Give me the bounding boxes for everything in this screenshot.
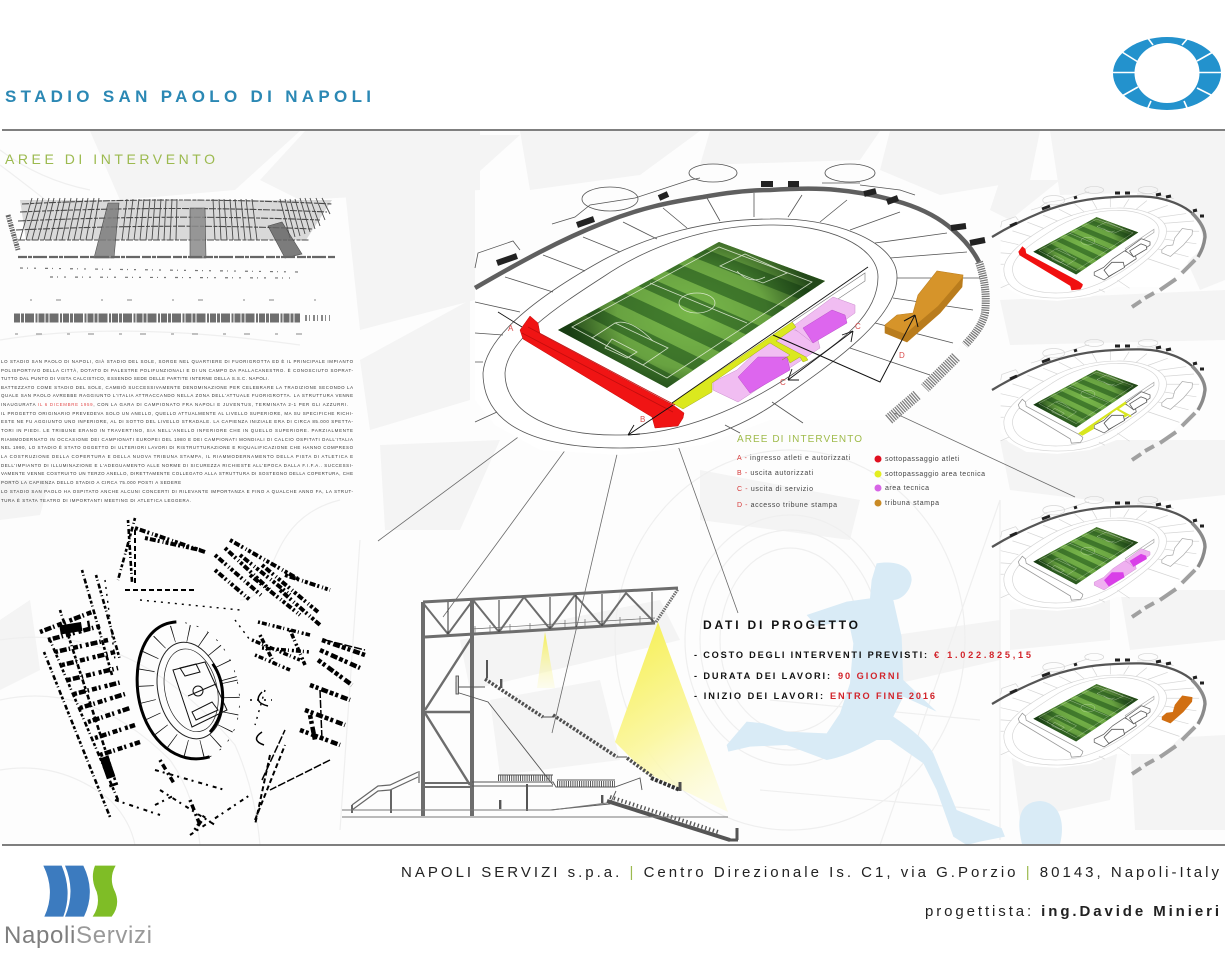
text block: dati di progetto: - INIZIO DEI LAVORI: [694,691,823,701]
site plan: city blocks [40,518,365,835]
heading: dati di progetto: DATI DI PROGETTO [703,618,858,632]
text block: dati di progetto: € 1.022.825,15 [934,650,1031,660]
header rule [2,129,1225,131]
logo wordmark: NapoliServizi [4,922,152,949]
text block: stadium history: NEL 1990, LO STADIO È STATO OGGETTO DI ULTERIORI LAVORI DI RISTRUTTURAZIONE E RIQUALIFICAZIONE CHE HANNO COMPRESO [1,445,354,450]
thumbnail: area tecnica [992,496,1205,617]
text block: stadium history [1,359,354,503]
legend: area tecnica [885,485,929,492]
text block: dati di progetto: - DURATA DEI LAVORI: [694,671,830,681]
logo mark [43,866,117,917]
legend: B - uscita autorizzati [737,470,813,477]
light cone small [537,632,555,688]
legend heading: AREE DI INTERVENTO [737,434,862,445]
legend: sottopassaggio area tecnica [885,471,985,478]
lower tribune [607,797,738,840]
text block: stadium history: RIAMMODERNATO IN OCCASIONE DEI CAMPIONATI EUROPEI DEL 1980 E DEI CAMPIONATI MONDIALI DI CALCIO OSPITATI DALL'ITALIA [1,437,353,442]
point labels: C [780,378,786,387]
area: sottopassaggio atleti [520,316,684,428]
connector lines from stadium to section [378,375,1075,733]
text block: stadium history: LO STADIO SAN PAOLO DI NAPOLI, GIÀ STADIO DEL SOLE, SORGE NEL QUARTIERE DI FUORIGROTTA ED È IL PRINCIPALE IMPIANTO [1,359,354,364]
point labels: D [899,351,905,360]
text block: stadium history: PORTÒ LA CAPIENZA DELLO STADIO A CIRCA 75.000 POSTI A SEDERE [1,480,181,485]
stand cross-section [342,588,738,840]
text block: stadium history: DELL'IMPIANTO DI ILLUMINAZIONE E L'ADEGUAMENTO ALLE NORME DI SICUREZZA RICHIESTE ALL'EPOCA DALLA F.I.F.A.. SUCCESSI- [1,463,354,468]
legend: tribuna stampa [885,500,939,507]
decks and internal lines [456,660,642,811]
text block: dati di progetto: - COSTO DEGLI INTERVENTI PREVISTI: [694,650,927,660]
text block: stadium history: ESTE NE FU AGGIUNTO UNO INFERIORE, AL DI SOTTO DEL LIVELLO STRADALE. LA CAPIENZA INIZIALE ERA DI CIRCA 85.000 SPETTA- [1,419,354,424]
football silhouette [1019,801,1062,844]
text block: dati di progetto: ENTRO FINE 2016 [830,691,935,701]
site plan: stadium [124,611,252,770]
point labels: B [640,415,645,424]
human figures [499,679,603,809]
text block: dati di progetto: 90 GIORNI [838,671,899,681]
main tribune steps [485,679,680,791]
light cone large [615,622,728,812]
stadium rings and radial lines [475,164,980,448]
point labels: A [508,324,514,333]
roof truss [423,588,678,637]
text block: stadium history: TORI IN PIEDI. LE TRIBUNE ERANO IN TRAVERTINO, SIA NELL'ANELLO INFERIORE CHE IN QUELLO SUPERIORE. PARZIALMENTE [1,428,353,433]
area: tribuna stampa [885,271,963,342]
icon: stadium logo ring [1112,37,1223,110]
legend: sottopassaggio atleti [885,456,959,463]
footer address: NAPOLI SERVIZI s.p.a. | Centro Direzionale Is. C1, via G.Porzio | 80143, Napoli-Italy [401,864,1220,881]
football pitch [558,242,825,388]
text block: dati di progetto [694,618,1031,701]
legend: C - uscita di servizio [737,486,813,493]
legend: D - accesso tribune stampa [737,502,837,509]
text block: stadium history: IL PROGETTO ORIGINARIO PREVEDEVA SOLO UN ANELLO, QUELLO ATTUALMENTE AL LIVELLO SUPERIORE, MA SU SPECIFICHE RICHI- [1,411,354,416]
site plan: pitch [173,662,227,727]
ground line [342,803,728,817]
text block: stadium history: TUTTO DAL PUNTO DI VISTA CALCISTICO, ESSENDO SEDE DELLE PARTITE INTERNE DELLA S.S.C. NAPOLI. [1,376,269,381]
area: sottopassaggio area tecnica [672,322,808,409]
thumbnail: tribuna stampa [992,653,1205,774]
aerial site plan [40,518,365,835]
logo: Napoli Servizi [4,866,152,949]
point labels [508,322,905,424]
white service strip [792,273,865,327]
thumbnail: sottopassaggio area tecnica [992,339,1205,460]
footer designer credit: progettista: ing.Davide Minieri [925,903,1219,920]
thumbnail: sottopassaggio atleti [992,186,1205,307]
soccer player silhouette [727,562,1005,845]
stadium outer band [475,184,986,420]
footer rule [2,844,1225,846]
panel: main stadium axonometric [475,164,988,455]
legend: A - ingresso atleti e autorizzati [737,455,850,462]
text block: stadium history: POLISPORTIVO DELLA CITTÀ, DOTATO DI PALESTRE POLIFUNZIONALI E DI UN CAMPO DA PALLACANESTRO. È CONOSCIUTO SOPRAT- [1,368,354,373]
text block: stadium history: INAUGURATA IL 6 DICEMBRE 1959, CON LA GARA DI CAMPIONATO FRA NAPOLI E JUVENTUS, TERMINATA 2-1 PER GLI AZZURRI. [1,402,348,407]
title: STADIO SAN PAOLO DI NAPOLI [5,87,371,106]
sketch: stand elevation [8,198,335,334]
columns and braces [423,600,472,816]
text block: stadium history: LA COSTRUZIONE DELLA COPERTURA E DELLA NUOVA TRIBUNA STAMPA, IL RIAMMODERNAMENTO DELLA PISTA DI ATLETICA E [1,454,353,459]
point labels: C [855,322,861,331]
heading: aree di intervento: AREE DI INTERVENTO [5,151,215,167]
text block: stadium history: VAMENTE VENNE COSTRUITO UN TERZO ANELLO, DIRETTAMENTE COLLEGATO ALLA STRUTTURA DI SOSTEGNO DELLA COPERTURA, CHE [1,471,353,476]
faint city map background [0,131,1225,845]
text block: stadium history: BATTEZZATO COME STADIO DEL SOLE, CAMBIÒ SUCCESSIVAMENTE DENOMINAZIONE PER CELEBRARE LA TRADIZIONE SECONDO LA [1,385,353,390]
text block: stadium history: TURA È STATA TEATRO DI IMPORTANTI MEETING DI ATLETICA LEGGERA. [1,498,191,503]
legend [737,434,985,509]
text block: stadium history: LO STADIO SAN PAOLO HA OSPITATO ANCHE ALCUNI CONCERTI DI RILEVANTE IMPORTANZA E FINO A QUALCHE ANNO FA, LA STRUT- [1,489,354,494]
area: area tecnica [713,297,855,402]
text block: stadium history: QUALE SAN PAOLO AVREBBE RAGGIUNTO L'ITALIA ATTRACCANDO NELLA ZONA DELL'ATTUALE FUORIGROTTA. LA STRUTTURA VENNE [1,393,353,398]
access stairs [352,771,419,813]
arrows and section lines [498,267,918,435]
